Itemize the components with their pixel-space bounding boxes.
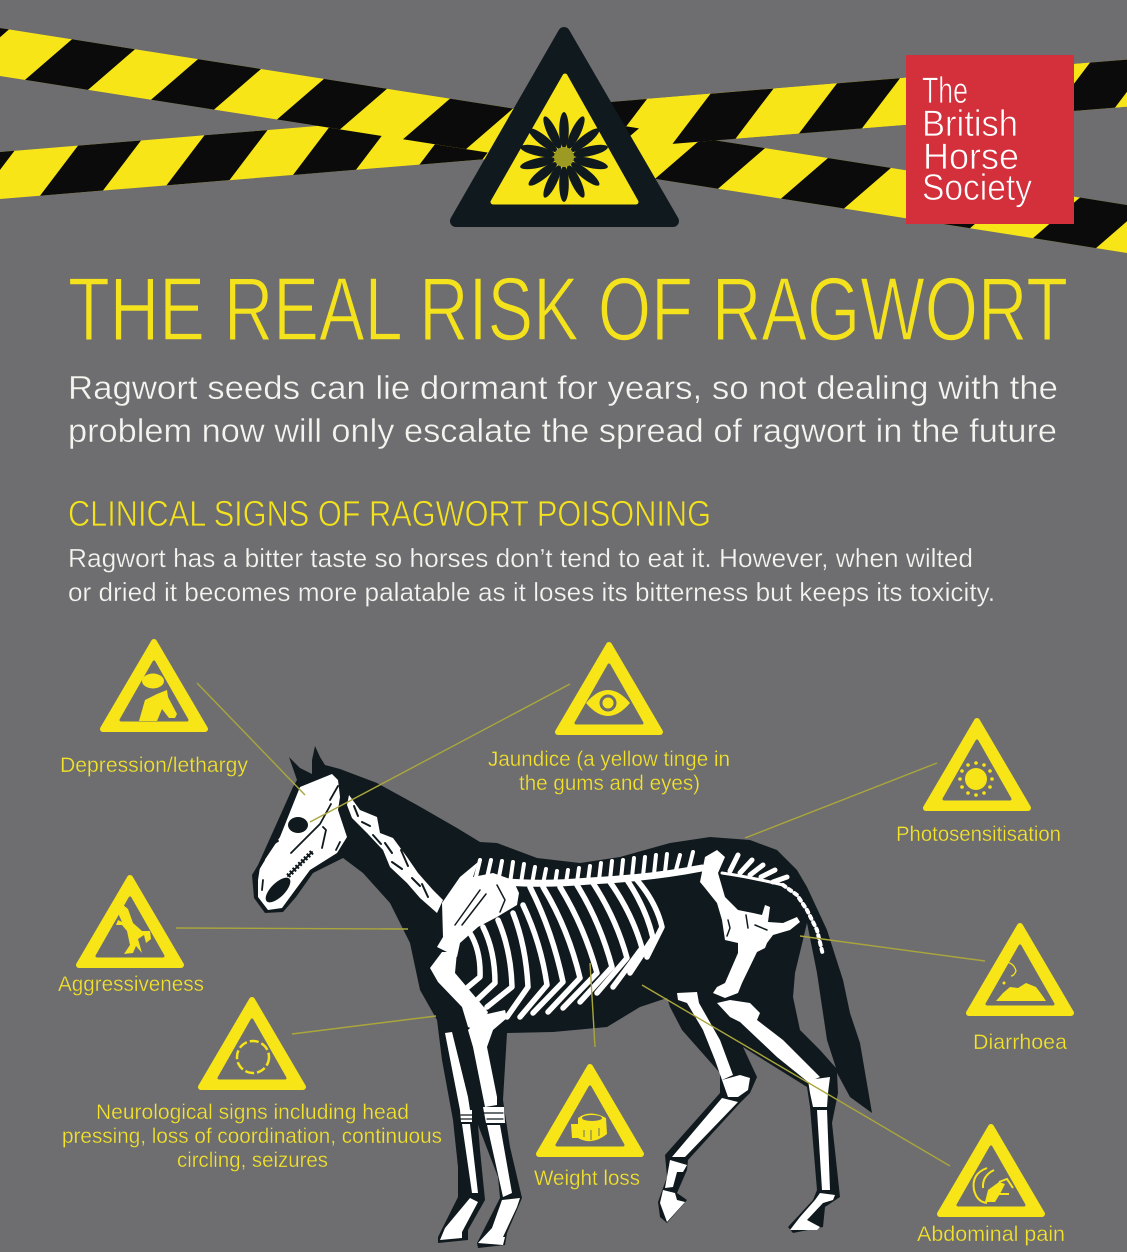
icon: horse rolling [974,1168,1013,1203]
label: neurological signs: circling, seizures [177,1149,328,1172]
spine [472,852,702,892]
scapula [437,862,519,957]
label: jaundice [488,748,730,795]
sign: photosensitisation [926,721,1028,808]
section description [68,543,995,607]
icon: rearing horse [116,904,151,954]
intro text: problem now will only escalate the spread of ragwort in the future [68,412,1057,449]
horse silhouette and skeleton [252,746,872,1248]
hazard tapes [0,12,1127,255]
logo: The British Horse Society: British [922,103,1018,144]
sign: abdominal pain [940,1127,1042,1214]
label: diarrhoea: Diarrhoea [973,1031,1067,1054]
logo: The British Horse Society [906,55,1074,224]
logo: The British Horse Society: Horse [923,136,1019,177]
sacrum and tail bones [722,855,823,955]
section heading: CLINICAL SIGNS OF RAGWORT POISONING [68,493,711,534]
sign: weight loss [539,1067,641,1154]
intro text: Ragwort seeds can lie dormant for years, so not dealing with the [68,369,1058,406]
icon: eye [586,690,630,716]
neck vertebrae [347,795,443,913]
label: weight loss: Weight loss [534,1167,640,1190]
logo: The British Horse Society: Society [922,167,1032,208]
label: abdominal pain: Abdominal pain [917,1223,1065,1246]
label: aggressiveness: Aggressiveness [58,973,204,996]
skull [258,774,347,910]
logo: The British Horse Society: The [922,70,968,111]
sign: aggressiveness [79,878,181,965]
icon: horse head with cloud [139,674,177,721]
connector lines [176,683,985,1166]
sign: diarrhoea [969,926,1071,1013]
section description: or dried it becomes more palatable as it loses its bitterness but keeps its toxicity. [68,577,995,607]
sign: neurological signs [201,1000,303,1087]
label: neurological signs: pressing, loss of coordination, continuous [62,1125,442,1148]
sign: depression/lethargy [103,642,205,729]
intro text [68,369,1058,449]
label: jaundice: the gums and eyes) [519,772,700,795]
horse silhouette [252,746,872,1248]
label: photosensitisation: Photosensitisation [896,823,1061,846]
label: neurological signs: Neurological signs including head [96,1101,409,1124]
gap between tail and hind leg [793,923,836,1068]
icon: tape measure [571,1114,607,1141]
label: neurological signs [62,1101,442,1172]
ribs [468,880,662,1017]
pelvis and hind femur [700,850,800,998]
hind leg bones [660,992,835,1230]
sign: jaundice [558,645,660,732]
label: depression/lethargy: Depression/lethargy [60,754,249,777]
label: jaundice: Jaundice (a yellow tinge in [488,748,730,771]
icon: droppings [996,962,1046,1001]
flower petals [519,112,609,202]
front leg bones [430,952,520,1245]
warning sign with ragwort flower [456,33,673,221]
icon: circling arrows [237,1041,269,1073]
section description: Ragwort has a bitter taste so horses don’t tend to eat it. However, when wilted [68,543,973,573]
icon: sun [958,761,994,797]
